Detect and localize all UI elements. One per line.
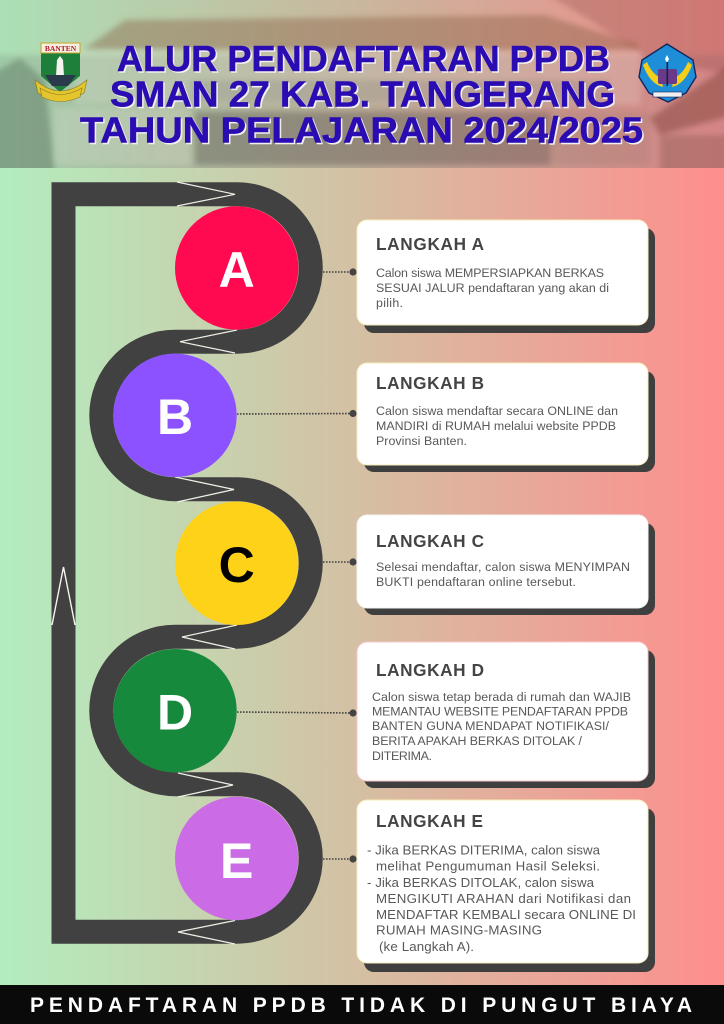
panel: Langkah B: MANDIRI di RUMAH melalui website PPDB <box>376 419 616 433</box>
panel: Langkah E: RUMAH MASING-MASING <box>376 922 542 938</box>
circle D: D <box>157 684 193 740</box>
connector: D <box>237 709 357 717</box>
connector: B <box>237 410 357 417</box>
title: TAHUN PELAJARAN 2024/2025 <box>82 111 644 152</box>
title: ALUR PENDAFTARAN PPDB <box>118 40 612 80</box>
panel: Langkah D: Calon siswa tetap berada di rumah dan WAJIB <box>372 690 631 704</box>
circle C: C <box>219 537 255 593</box>
circle B <box>113 354 237 477</box>
connector: C <box>323 558 357 566</box>
title: SMAN 27 KAB. TANGERANG <box>110 74 615 114</box>
panel: Langkah C: Selesai mendaftar, calon siswa MENYIMPAN <box>376 560 630 574</box>
panel: Langkah C: BUKTI pendaftaran online tersebut. <box>376 575 576 589</box>
panel: Langkah B: Provinsi Banten. <box>376 434 467 448</box>
connector: A <box>323 268 357 276</box>
circle A: A <box>219 242 255 298</box>
circle C <box>175 502 298 625</box>
panel: Langkah E: melihat Pengumuman Hasil Seleksi. <box>376 858 600 874</box>
winding flow track with arrow <box>52 182 311 944</box>
panel: Langkah E <box>357 800 655 972</box>
panel: Langkah A: SESUAI JALUR pendaftaran yang akan di <box>376 281 609 295</box>
panel: Langkah E: LANGKAH E <box>376 811 483 831</box>
panel: Langkah A: pilih. <box>376 296 403 310</box>
header photo of school building <box>0 0 724 175</box>
panel: Langkah D <box>357 642 655 788</box>
connector: E <box>323 855 357 863</box>
circle E: E <box>220 833 253 889</box>
panel: Langkah E: (ke Langkah A). <box>379 939 474 954</box>
panel: Langkah D: BANTEN GUNA MENDAPAT NOTIFIKASI/ <box>372 719 610 733</box>
logo: Provinsi Banten: BANTEN <box>45 44 77 53</box>
title: SMAN 27 KAB. TANGERANG <box>112 75 616 116</box>
panel: Langkah D: MEMANTAU WEBSITE PENDAFTARAN PPDB <box>372 704 628 718</box>
panel: Langkah B: Calon siswa mendaftar secara ONLINE dan <box>376 404 618 418</box>
footer banner: PENDAFTARAN PPDB TIDAK DI PUNGUT BIAYA <box>30 994 692 1017</box>
circle E <box>175 797 298 920</box>
panel: Langkah B <box>357 363 655 472</box>
panel: Langkah A: LANGKAH A <box>376 234 484 254</box>
logo: Provinsi Banten <box>35 43 87 102</box>
panel: Langkah D: LANGKAH D <box>376 660 484 680</box>
panel: Langkah E: MENGIKUTI ARAHAN dari Notifikasi dan <box>376 891 631 906</box>
panel: Langkah E: - Jika BERKAS DITOLAK, calon siswa <box>367 875 595 890</box>
circle D <box>113 649 237 772</box>
title <box>80 38 644 152</box>
footer banner <box>0 985 724 1024</box>
panel: Langkah E: MENDAFTAR KEMBALI secara ONLINE DI <box>376 907 636 922</box>
title: ALUR PENDAFTARAN PPDB <box>117 38 610 79</box>
panel: Langkah C: LANGKAH C <box>376 531 484 551</box>
logo: SMAN 27 <box>639 44 696 102</box>
panel: Langkah D: BERITA APAKAH BERKAS DITOLAK / <box>372 734 583 748</box>
title: TAHUN PELAJARAN 2024/2025 <box>80 110 643 150</box>
panel: Langkah C <box>357 515 655 615</box>
circle A <box>175 206 298 330</box>
panel: Langkah B: LANGKAH B <box>376 373 484 393</box>
panel: Langkah A: Calon siswa MEMPERSIAPKAN BERKAS <box>376 266 604 280</box>
circle B: B <box>157 389 193 445</box>
panel: Langkah D: DITERIMA. <box>372 749 432 763</box>
panel: Langkah A <box>357 220 655 333</box>
panel: Langkah E: - Jika BERKAS DITERIMA, calon siswa <box>367 842 601 858</box>
